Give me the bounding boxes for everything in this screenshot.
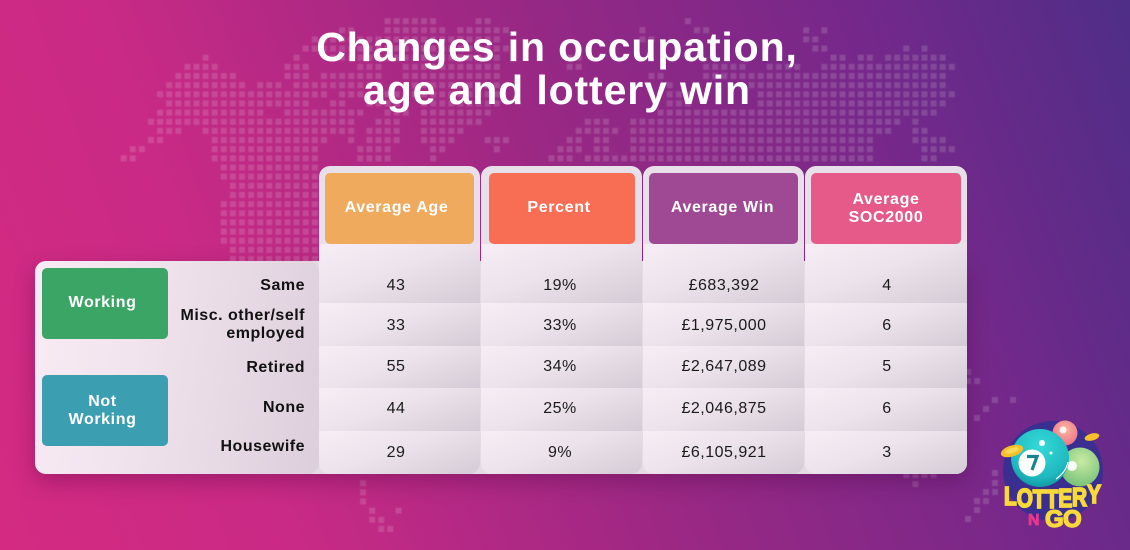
header: percent [489, 173, 635, 244]
values: average SOC2000: 4 [882, 277, 892, 294]
header: percent: Percent [527, 199, 591, 216]
logo: Lottery N Go [1000, 420, 1103, 533]
category: not working [42, 374, 168, 446]
values: average SOC2000: 6 [882, 317, 892, 334]
title: Changes in occupation, [316, 24, 798, 70]
row label: misc. other/self employed: employed [226, 325, 305, 342]
values: average SOC2000 [882, 277, 892, 461]
values: average win: £6,105,921 [681, 444, 767, 461]
row label: misc. other/self employed [181, 307, 305, 342]
title [316, 24, 798, 112]
values: average SOC2000: 3 [882, 444, 892, 461]
values: average age: 43 [387, 277, 405, 294]
category: not working: Not [88, 392, 117, 410]
header: average win [649, 173, 798, 244]
row label: retired: Retired [246, 359, 305, 376]
values: average win: £683,392 [689, 277, 759, 294]
panel: row labels [35, 261, 319, 474]
logo: Lottery N Go: N [1028, 512, 1040, 529]
values: average win [681, 277, 767, 461]
row label: housewife: Housewife [220, 438, 305, 455]
values: average win: £1,975,000 [681, 317, 767, 334]
values: average SOC2000: 5 [882, 358, 892, 375]
header: average age [325, 173, 474, 244]
category: working [42, 268, 168, 339]
row label: same: Same [260, 277, 305, 294]
title: age and lottery win [363, 66, 751, 112]
header: average SOC2000: SOC2000 [849, 209, 923, 226]
row label: none: None [263, 399, 305, 416]
values: average win: £2,046,875 [681, 400, 767, 417]
header: average win: Average Win [671, 199, 774, 216]
column: average win [643, 166, 804, 474]
values: average age [387, 277, 405, 461]
values: average age: 44 [387, 400, 405, 417]
header: average SOC2000: Average [852, 191, 920, 208]
values: percent: 9% [548, 444, 572, 461]
values: average age: 55 [387, 358, 405, 375]
column: average age [319, 166, 480, 474]
values: percent: 33% [543, 317, 577, 334]
values: average age: 33 [387, 317, 405, 334]
logo: Lottery N Go: LOTTERY [1004, 480, 1101, 514]
row label: misc. other/self employed: Misc. other/self [181, 307, 305, 324]
header: average SOC2000 [811, 173, 961, 244]
values: percent: 34% [543, 358, 577, 375]
values: percent: 19% [543, 277, 577, 294]
header: average age: Average Age [345, 199, 448, 216]
values: average SOC2000: 6 [882, 400, 892, 417]
column: average SOC2000 [805, 166, 967, 474]
logo: Lottery N Go: GO [1045, 506, 1082, 533]
column: percent [481, 166, 642, 474]
values: average win: £2,647,089 [681, 358, 767, 375]
category: not working: Working [69, 410, 136, 428]
values: percent [543, 277, 577, 461]
category: working: Working [69, 294, 136, 310]
values: percent: 25% [543, 400, 577, 417]
values: average age: 29 [387, 444, 405, 461]
table backing with shadow [35, 261, 967, 474]
